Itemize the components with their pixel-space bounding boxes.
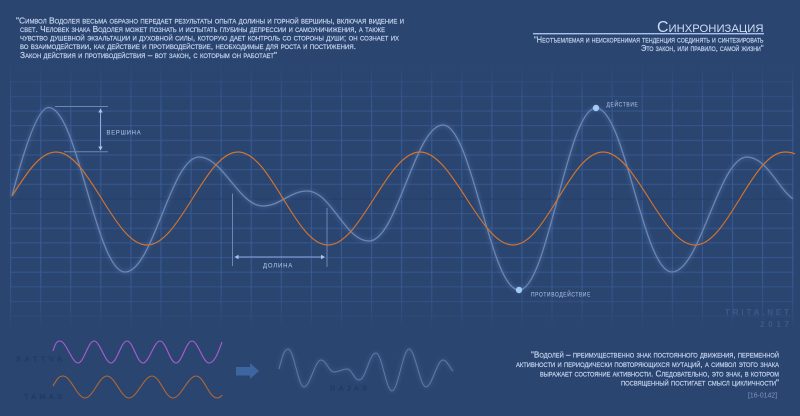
text block: closing quote: выражает состояние активности. Следовательно, это знак, в котором bbox=[540, 368, 779, 378]
point: counteraction bbox=[516, 287, 522, 293]
text block: closing quote: активности и периодически повторяющихся мутаций, а символ этого знака bbox=[516, 359, 779, 369]
chart: action and counteraction waves bbox=[12, 100, 795, 298]
blue resulting wave bbox=[12, 108, 793, 290]
tamas wave bbox=[53, 376, 222, 398]
subtitle quote: "Неотъемлемая и неискоренимая тенденция соединять и синтезировать bbox=[534, 35, 764, 45]
text block: intro quote: во взаимодействии, как действие и противодействие, необходимые для роста и постижения. bbox=[20, 41, 356, 51]
subtitle quote bbox=[534, 35, 764, 53]
arrow bbox=[236, 363, 259, 379]
annotation: peak: ВЕРШИНА bbox=[106, 129, 142, 136]
annotation: valley: ДОЛИНА bbox=[263, 262, 293, 270]
annotation: valley bbox=[232, 194, 327, 270]
text block: intro quote: Закон действия и противодействия – вот закон, с которым он работает" bbox=[20, 50, 277, 60]
text block: closing quote bbox=[516, 350, 779, 388]
orange base wave bbox=[12, 152, 795, 245]
reference number: [16-0142] bbox=[748, 392, 777, 400]
text block: intro quote: свет. Человек знака Водолея может познать и испытать глубины депрессии и самоуничижения, а также bbox=[20, 24, 385, 34]
title: Синхронизация bbox=[657, 19, 764, 36]
subtitle quote: Это закон, или правило, самой жизни" bbox=[641, 43, 764, 53]
watermark: 2017 bbox=[760, 320, 790, 329]
watermark bbox=[725, 308, 790, 329]
label: action: ДЕЙСТВИЕ bbox=[606, 100, 638, 108]
sattva label: SATTVA bbox=[16, 354, 67, 364]
text block: intro quote: "Символ Водолея весьма образно передает результаты опыта долины и горной вершины, включая видение и bbox=[16, 16, 404, 26]
title rule bbox=[533, 33, 764, 34]
label: counteraction: ПРОТИВОДЕЙСТВИЕ bbox=[531, 290, 591, 298]
annotation: peak bbox=[55, 106, 142, 152]
text block: closing quote: "Водолей – преимущественно знак постоянного движения, переменной bbox=[531, 350, 779, 360]
text block: intro quote bbox=[16, 16, 404, 60]
sattva wave bbox=[53, 341, 222, 363]
tamas label: TAMAS bbox=[24, 392, 67, 401]
text block: intro quote: чувство душевной экзальтации и духовной силы, которую дает контроль со стороны души; он сознает их bbox=[20, 33, 399, 43]
rajas label: RAJAS bbox=[330, 384, 372, 392]
grid bbox=[10, 62, 794, 328]
watermark: TRITA.NET bbox=[725, 308, 789, 317]
rajas wave bbox=[279, 349, 453, 391]
point: action bbox=[593, 105, 599, 111]
text block: closing quote: посвященный постигает смысл цикличности" bbox=[621, 378, 779, 388]
